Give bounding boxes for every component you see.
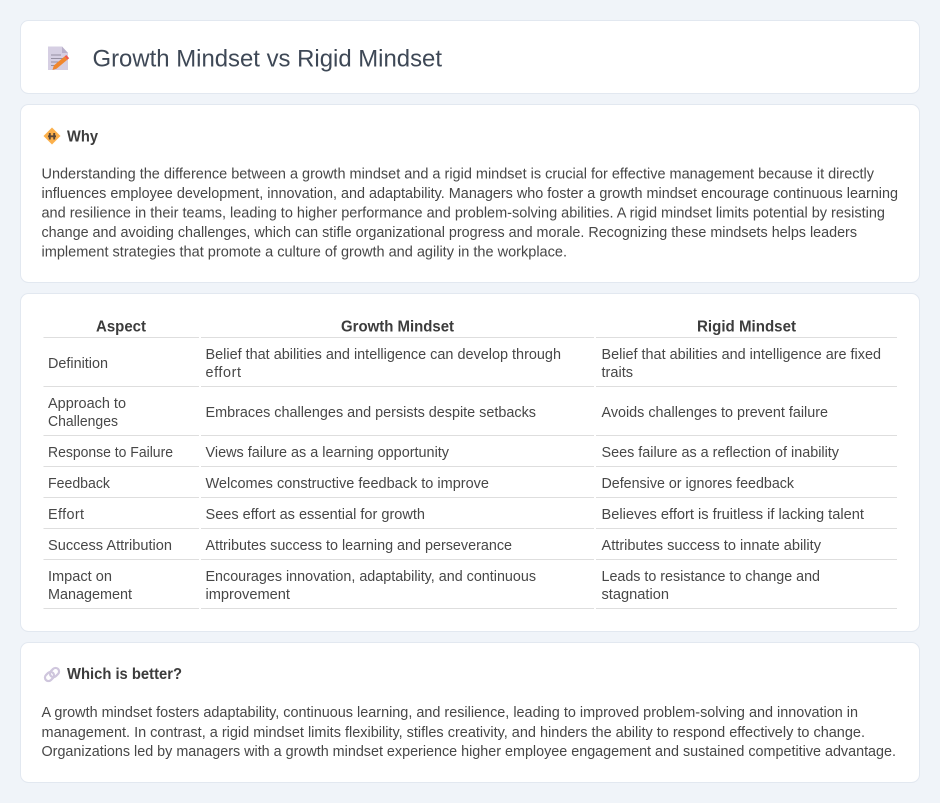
table header row bbox=[44, 318, 897, 338]
text block: which is better paragraph: management. In contrast, a rigid mindset limits flexibility, stifles creativity, and hinders the ability to respond effectively to change. bbox=[42, 725, 865, 741]
row: impact on management: stagnation bbox=[602, 587, 669, 603]
row: approach to challenges: Embraces challenges and persists despite setbacks bbox=[206, 405, 536, 421]
panel: why bbox=[20, 104, 920, 282]
row: definition: Belief that abilities and intelligence can develop through bbox=[206, 347, 561, 363]
panel: comparison table bbox=[20, 294, 920, 632]
heading: which is better: Which is better? bbox=[67, 666, 182, 683]
row: approach to challenges: Approach to bbox=[48, 396, 126, 412]
text block: which is better paragraph: Organizations led by managers with a growth mindset experience higher employee engagement and sustained competitive advantage. bbox=[42, 744, 896, 760]
table header row: Growth Mindset bbox=[341, 318, 455, 335]
text block: which is better paragraph: A growth mindset fosters adaptability, continuous learning, and resilience, leading to improved problem-solving and innovation in bbox=[42, 705, 858, 721]
row: impact on management: Leads to resistance to change and bbox=[602, 569, 820, 585]
table header row: Rigid Mindset bbox=[697, 318, 797, 335]
row: approach to challenges: Avoids challenges to prevent failure bbox=[602, 405, 828, 421]
row: success attribution: Attributes success to innate ability bbox=[602, 538, 822, 554]
row: definition: traits bbox=[602, 365, 633, 381]
icon: document with pencil bbox=[48, 46, 69, 70]
row: effort bbox=[44, 507, 897, 528]
row: feedback: Feedback bbox=[48, 476, 111, 492]
row: response to failure: Response to Failure bbox=[48, 445, 173, 461]
row: definition: Belief that abilities and intelligence are fixed bbox=[602, 347, 881, 363]
heading: why: Why bbox=[67, 128, 98, 145]
text block: which is better paragraph bbox=[42, 705, 896, 760]
row: approach to challenges: Challenges bbox=[48, 414, 118, 430]
row: success attribution bbox=[44, 538, 897, 560]
text block: why paragraph: implement strategies that promote a culture of growth and agility in the workplace. bbox=[42, 244, 567, 260]
table header row: Aspect bbox=[96, 318, 147, 335]
row: definition: Definition bbox=[48, 356, 108, 372]
row: response to failure: Views failure as a learning opportunity bbox=[206, 445, 450, 461]
row: success attribution: Attributes success to learning and perseverance bbox=[206, 538, 512, 554]
row: definition bbox=[44, 347, 897, 386]
row: approach to challenges bbox=[44, 396, 897, 436]
row: effort: Believes effort is fruitless if lacking talent bbox=[602, 507, 864, 523]
text block: why paragraph bbox=[42, 166, 898, 260]
row: impact on management bbox=[44, 569, 897, 608]
row: impact on management: improvement bbox=[206, 587, 290, 603]
panel: which is better bbox=[20, 642, 920, 782]
row: success attribution: Success Attribution bbox=[48, 538, 172, 554]
icon: chain link bbox=[43, 666, 61, 683]
row: impact on management: Encourages innovation, adaptability, and continuous bbox=[206, 569, 536, 585]
row: feedback: Welcomes constructive feedback to improve bbox=[206, 476, 489, 492]
title: Growth Mindset vs Rigid Mindset bbox=[92, 46, 442, 72]
row: feedback bbox=[44, 476, 897, 498]
row: impact on management: Management bbox=[48, 587, 132, 603]
row: response to failure bbox=[44, 445, 897, 466]
row: response to failure: Sees failure as a reflection of inability bbox=[602, 445, 840, 461]
panel: title header bbox=[20, 20, 920, 94]
row: feedback: Defensive or ignores feedback bbox=[602, 476, 795, 492]
row: impact on management: Impact on bbox=[48, 569, 112, 585]
text block: why paragraph: change and avoiding challenges, which can stifle organizational progress and morale. Recognizing these mindsets helps leaders bbox=[42, 225, 857, 241]
icon: warning diamond bbox=[44, 128, 60, 144]
text block: why paragraph: Understanding the difference between a growth mindset and a rigid mindset is crucial for effective management because it directly bbox=[42, 166, 875, 182]
row: definition: effort bbox=[206, 365, 241, 381]
text block: why paragraph: and resilience in their teams, leading to higher performance and problem-solving abilities. A rigid mindset limits potential by resisting bbox=[42, 206, 885, 222]
text block: why paragraph: influences employee development, innovation, and adaptability. Managers who foster a growth mindset encourage continuous learning bbox=[42, 186, 898, 202]
row: effort: Effort bbox=[48, 507, 84, 523]
row: effort: Sees effort as essential for growth bbox=[206, 507, 425, 523]
